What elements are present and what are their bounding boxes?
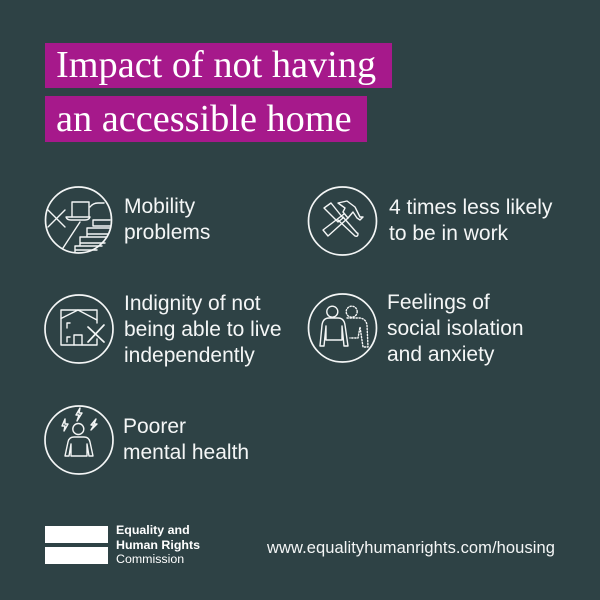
- text: social isolation: social isolation: [387, 317, 524, 340]
- text: indignity: independently: [124, 344, 255, 367]
- text: mobility problems: [124, 195, 210, 244]
- logo text: Equality and: [116, 523, 190, 537]
- title line 2: an accessible home: [56, 98, 352, 140]
- text: mobility problems: Mobility: [124, 195, 195, 218]
- text: poorer mental health: mental health: [123, 441, 249, 464]
- website url: www.equalityhumanrights.com/housing: [267, 539, 555, 557]
- text: 4 times less likely: 4 times less likely: [389, 196, 552, 219]
- icon: house with cross: [45, 295, 113, 363]
- title line 1: Impact of not having: [56, 44, 376, 86]
- text: mobility problems: problems: [124, 221, 210, 244]
- text: social isolation: [387, 291, 524, 366]
- logo text: [116, 523, 200, 566]
- text: social isolation: and anxiety: [387, 343, 494, 366]
- title: [45, 43, 392, 142]
- icon: person with lightning bolts: [45, 406, 113, 474]
- logo bars: [45, 526, 108, 564]
- text: poorer mental health: Poorer: [123, 415, 186, 438]
- logo text: Commission: [116, 552, 184, 566]
- icon: mobility stairs and chair: [46, 187, 112, 253]
- text: social isolation: Feelings of: [387, 291, 490, 314]
- text: 4 times less likely: [389, 196, 552, 245]
- text: indignity: [124, 292, 282, 367]
- text: indignity: Indignity of not: [124, 292, 261, 315]
- logo text: Human Rights: [116, 538, 200, 552]
- text: poorer mental health: [123, 415, 249, 464]
- text: 4 times less likely: to be in work: [389, 222, 508, 245]
- icon: hammer and screwdriver: [308, 187, 376, 255]
- icon: person with dotted companion: [308, 294, 376, 362]
- text: indignity: being able to live: [124, 318, 282, 341]
